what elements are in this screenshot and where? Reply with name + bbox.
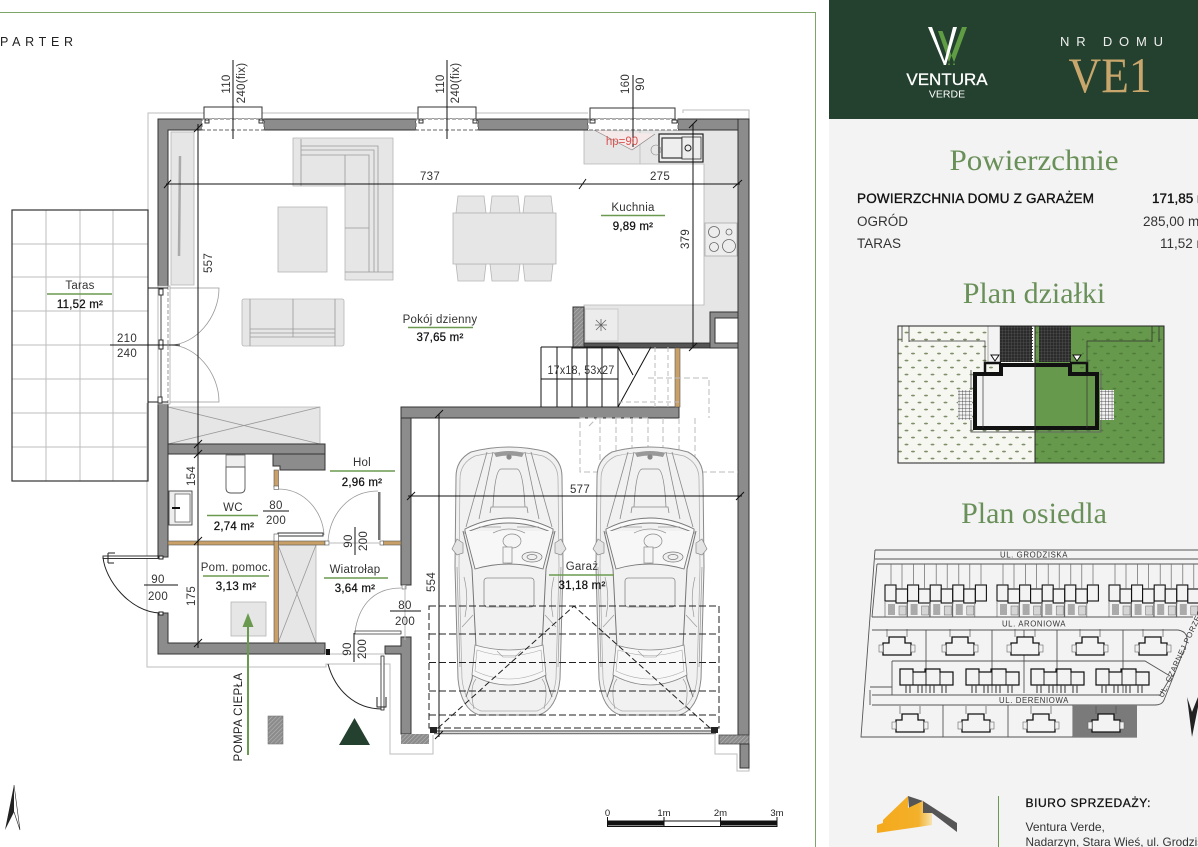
dimension labels: 200 — [148, 591, 168, 603]
sales office — [1026, 796, 1198, 847]
street names — [999, 550, 1198, 705]
timber partition walls — [168, 348, 680, 643]
dimension labels: 200 — [357, 639, 369, 659]
stairs — [541, 347, 680, 407]
garage door — [429, 606, 719, 734]
top housing row — [885, 564, 986, 617]
icon: entrance triangle — [339, 718, 370, 745]
terrace — [12, 210, 148, 481]
label: pokoj dzienny — [403, 314, 477, 344]
icon: north arrow — [5, 785, 20, 830]
divider — [998, 796, 1000, 847]
label: wc: WC — [223, 502, 243, 514]
lower quad row — [900, 669, 1149, 693]
label: kuchnia: Kuchnia — [611, 202, 655, 214]
toilet — [226, 455, 245, 493]
label: hol: 2,96 m² — [342, 477, 382, 489]
dimension labels: 90 — [343, 534, 355, 548]
label: pokoj dzienny: Pokój dzienny — [403, 314, 477, 326]
label: wiatrolap: 3,64 m² — [335, 583, 375, 595]
furniture — [168, 132, 556, 643]
dimension labels: 90 — [635, 77, 647, 91]
terrace door — [148, 286, 219, 404]
dimension lines — [110, 60, 744, 739]
dimension labels: 240 — [117, 348, 137, 360]
label: taras: 11,52 m² — [57, 299, 103, 311]
interior doors — [274, 486, 406, 640]
entrance doors — [103, 553, 386, 710]
developer logo — [877, 796, 957, 833]
label: hol — [330, 457, 395, 489]
dimension labels: 90 — [151, 574, 165, 586]
dimension labels: 737 — [420, 171, 440, 183]
dimension labels: 160 — [620, 74, 632, 94]
highlighted plot — [1073, 705, 1137, 737]
dimension labels: 200 — [266, 515, 286, 527]
middle duplex row — [879, 629, 1171, 655]
heading: plan dzialki: Plan działki — [963, 277, 1105, 310]
label: hol: Hol — [353, 457, 371, 469]
areas table — [857, 191, 1198, 251]
estate plan — [861, 550, 1198, 737]
dimension labels: 577 — [570, 484, 590, 496]
dimension labels: 200 — [395, 616, 415, 628]
dimension labels: 110 — [435, 74, 447, 94]
panel: floor plan — [12, 60, 749, 771]
dimension labels: 554 — [426, 572, 438, 592]
label: garaz — [549, 561, 614, 592]
dimension labels: 90 — [342, 642, 354, 656]
windows — [202, 107, 678, 130]
dimension labels: 210 — [117, 333, 137, 345]
scale bar: 1m — [657, 808, 671, 819]
label: pokoj dzienny: 37,65 m² — [417, 332, 463, 344]
dimension labels: 110 — [221, 74, 233, 94]
label: wiatrolap: Wiatrołap — [330, 564, 380, 576]
plan frame — [0, 12, 816, 847]
street names: UL. ARONIOWA — [1002, 620, 1066, 628]
dimension labels: 240(fix) — [236, 63, 248, 103]
label: taras: Taras — [65, 280, 95, 292]
plot outline — [147, 110, 749, 771]
header band — [829, 0, 1198, 119]
plot plan — [898, 326, 1164, 463]
north arrow small — [1187, 697, 1198, 737]
heading: parter: PARTER — [0, 35, 73, 49]
street names: UL. DERENIOWA — [999, 696, 1069, 705]
label: pom. pomoc.: 3,13 m² — [216, 581, 256, 593]
car 1 — [452, 447, 566, 715]
arrow: heat pump — [242, 613, 254, 755]
sales office: BIURO SPRZEDAŻY: — [1026, 796, 1151, 810]
logo: VENTURA — [906, 70, 988, 89]
label: wc — [207, 502, 258, 533]
top housing row 2 — [997, 564, 1098, 617]
walls — [158, 119, 749, 768]
logo — [906, 27, 988, 100]
dimension labels: 200 — [358, 531, 370, 551]
scale bar: 3m — [770, 808, 784, 819]
dimension labels: 80 — [269, 500, 283, 512]
label: garaz: Garaż — [566, 561, 598, 573]
heading: plan osiedla: Plan osiedla — [961, 497, 1107, 530]
house number: NR DOMU — [1060, 34, 1163, 49]
heading: powierzchnie: Powierzchnie — [950, 144, 1118, 177]
label: wiatrolap — [324, 564, 388, 595]
washbasin — [169, 491, 192, 525]
dimension labels: 275 — [650, 171, 670, 183]
label: garaz: 31,18 m² — [559, 580, 605, 592]
top housing row 3 — [1109, 564, 1198, 617]
dimension labels: 17x18, 53x27 — [548, 365, 614, 377]
label: pom. pomoc. — [201, 562, 271, 593]
scale bar — [605, 808, 784, 827]
scale bar: 0 — [605, 808, 610, 819]
dimension labels: 154 — [186, 466, 198, 486]
heat pump label: POMPA CIEPŁA — [233, 673, 245, 761]
dashed upper-floor outline — [580, 378, 738, 472]
dimension labels: 240(fix) — [450, 63, 462, 103]
label: kuchnia: 9,89 m² — [613, 221, 653, 233]
label: wc: 2,74 m² — [214, 521, 254, 533]
kitchen — [584, 130, 738, 343]
sales office: Ventura Verde, — [1026, 820, 1105, 834]
areas table: TARAS — [857, 236, 901, 251]
panel: sidebar — [829, 0, 1198, 847]
areas table: POWIERZCHNIA DOMU Z GARAŻEM — [857, 191, 1094, 206]
dimension labels: hp=90 — [606, 136, 638, 148]
dimension labels: 80 — [398, 600, 412, 612]
logo: VERDE — [929, 88, 965, 100]
estate roads — [861, 550, 1198, 737]
dimension labels — [117, 63, 692, 659]
label: pom. pomoc.: Pom. pomoc. — [201, 562, 271, 574]
icon: heat pump unit — [268, 716, 283, 744]
bottom duplex row — [892, 706, 1124, 732]
car 2 — [593, 447, 707, 715]
areas table: OGRÓD — [857, 214, 908, 229]
street names: UL. GRODZISKA — [1000, 550, 1068, 560]
dimension labels: 379 — [680, 229, 692, 249]
label: taras — [47, 280, 112, 311]
dimension labels: 557 — [203, 253, 215, 273]
label: kuchnia — [601, 202, 665, 233]
house number: VE1 — [1068, 47, 1152, 103]
scale bar: 2m — [714, 808, 727, 819]
dimension labels: 175 — [186, 586, 198, 606]
